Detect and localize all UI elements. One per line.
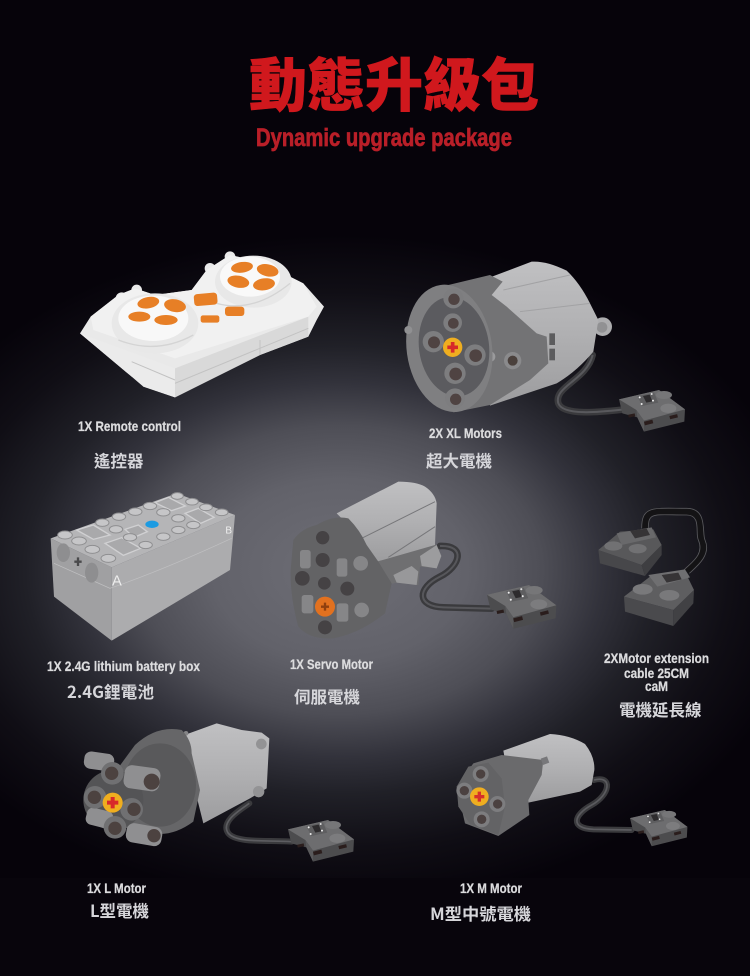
label: L motor: 1X L Motor: [87, 880, 146, 896]
body: [337, 482, 437, 563]
studs: [58, 493, 228, 562]
cable: [558, 355, 625, 412]
side holes: [57, 543, 70, 562]
icon: L motor connector: [288, 820, 354, 862]
label: remote control chinese: 遙控器: [94, 448, 144, 472]
cable: [577, 779, 632, 830]
icon: battery box: B: [225, 525, 232, 536]
icon: XL motor connector: [619, 390, 685, 432]
icon: servo motor: [291, 482, 492, 639]
label: remote control: 1X Remote control: [78, 418, 181, 434]
label: extension cable chinese: 電機延長線: [619, 697, 702, 721]
icon: M motor: [456, 734, 632, 836]
icon: L motor: [83, 723, 292, 847]
icon: XL motor: [398, 262, 625, 418]
lug: [593, 317, 612, 336]
body: [503, 734, 594, 803]
label: battery box: 1X 2.4G lithium battery box: [47, 658, 200, 674]
brick 1: [598, 550, 645, 576]
face letters: A: [112, 573, 122, 589]
collar: [291, 517, 392, 639]
collar: [448, 275, 548, 412]
icon: battery box: [51, 493, 235, 641]
label: extension cable: [604, 650, 709, 694]
label: extension cable: 2XMotor extension: [604, 650, 709, 666]
icon: remote control: [80, 251, 324, 397]
label: extension cable: cable 25CM: [624, 665, 689, 681]
collar: [457, 755, 543, 836]
cable: [226, 803, 292, 842]
label: L motor chinese: L型電機: [90, 898, 149, 922]
cable: [423, 546, 492, 609]
label: extension cable: caM: [645, 678, 668, 694]
body: [490, 262, 598, 406]
icon: servo connector: [487, 585, 556, 629]
label: XL motors chinese: 超大電機: [426, 448, 492, 472]
label: M motor chinese: M型中號電機: [430, 901, 532, 925]
label: servo motor: 1X Servo Motor: [290, 656, 373, 672]
collar: [117, 729, 200, 834]
face bosses: [83, 751, 163, 847]
face: [457, 763, 505, 835]
body: [180, 723, 269, 823]
face: [295, 531, 354, 634]
label: M motor: 1X M Motor: [460, 880, 522, 896]
label: battery chinese: 2.4G鋰電池: [67, 679, 154, 703]
underside and legs: [373, 543, 441, 587]
brick 2: [624, 597, 673, 626]
label: servo chinese: 伺服電機: [294, 684, 360, 708]
face: [398, 279, 500, 418]
bottom dark band: [0, 878, 750, 976]
icon: M motor connector: [630, 810, 687, 846]
icon: extension cable: [598, 508, 707, 626]
face plate: [83, 770, 143, 830]
subtitle: Dynamic upgrade package: [256, 124, 512, 152]
orange buttons: [128, 261, 280, 325]
cable: [645, 511, 703, 572]
frames: [77, 497, 214, 555]
label: XL motors: 2X XL Motors: [429, 425, 502, 441]
title: 動態升級包: [249, 39, 539, 123]
